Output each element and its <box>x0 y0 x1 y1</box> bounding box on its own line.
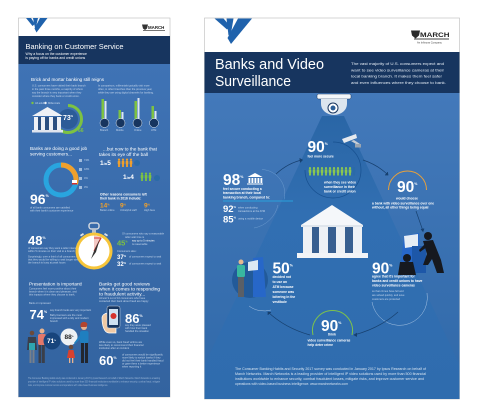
text: brick and mortar left: say the branch is very important when they <box>32 90 82 94</box>
bar chart: channels: Online <box>134 128 142 132</box>
intro text: want to see video surveillance cameras at their <box>351 68 445 72</box>
header band <box>204 52 460 93</box>
stat 48: % <box>42 236 46 240</box>
text: brick and mortar left: consider where they bank or credit union. <box>32 94 80 98</box>
stat 1 in 5: 1in5 <box>100 160 111 167</box>
icon: ATM user <box>232 257 268 298</box>
circle stat 88 <box>60 328 78 346</box>
bar chart: channels: Mobile <box>116 128 124 132</box>
text: 98 detail: feel secure conducting a <box>223 187 262 191</box>
text: 60 detail: more likely to switch banks if they <box>122 356 161 360</box>
March logo: An Infinova Company <box>417 40 443 44</box>
text: other wait: Consumers also: <box>117 249 137 253</box>
text: think: think <box>328 332 336 336</box>
text: 96 detail: of all bank consumers are satisfied <box>30 206 70 210</box>
donut chart <box>46 165 77 195</box>
circle stat 71: % <box>54 340 56 342</box>
March logo: MARCH <box>420 32 450 39</box>
label: impressed: Bank or impressed <box>29 301 51 305</box>
title: Banking on Customer Service <box>26 42 123 51</box>
stat 73: % <box>71 115 74 118</box>
subtitle: Why a focus on the customer experience <box>26 52 87 56</box>
stat: 90 would choose: % <box>414 182 418 186</box>
footer text: operations with video-based business intelligence. www.marchnetworks.com <box>235 382 348 386</box>
stat 45: 45 <box>117 238 125 248</box>
people row <box>309 167 355 176</box>
heading: presentation: Presentation is important! <box>29 282 82 286</box>
text: 85 detail: using a mobile device <box>238 216 264 220</box>
circle stat 88: % <box>72 336 74 338</box>
icon: central bank <box>297 205 368 258</box>
text: 48 detail: within 5 minutes on their visit to a branch <box>28 249 75 253</box>
heading: banks doing a good job: Banks are doing a good job <box>30 146 87 151</box>
logo chevron <box>26 18 48 32</box>
people green <box>141 172 151 181</box>
text: 60 detail: did not feel their bank handled fraud <box>122 358 164 362</box>
stat 32: % <box>124 262 127 265</box>
text: waiting heading: Of consumers who say a reasonable <box>122 232 165 236</box>
donut legend <box>79 158 90 189</box>
footer text: provider of intelligent IP video solutions used by more than 500 financial institutions worldwide to enhance security, combat fraud, mitigate <box>28 380 160 384</box>
donut legend: 74% <box>84 158 90 162</box>
text: 48 detail: that they would be willing to wait longer when <box>28 258 80 262</box>
text: 86 detail: with how their bank <box>125 326 148 330</box>
text: agree small: so that crimes have fell and <box>372 289 404 293</box>
stats orange row: 9 <box>120 202 124 210</box>
text: brick and mortar left: U.S. consumers have visited their bank branch <box>32 84 86 88</box>
heading: good reviews: when it comes to responding <box>99 286 160 292</box>
March logo <box>142 24 165 31</box>
icon: woman and child <box>67 322 88 363</box>
text: decided not: to use an <box>272 280 287 284</box>
text: 48 detail: Surprisingly, over a third of all consumers say <box>28 254 81 258</box>
stats captions: High fees <box>144 208 156 212</box>
text: would choose: would choose <box>395 196 418 200</box>
text: 45 detail: is reasonable <box>132 242 148 246</box>
arc: agree circle <box>372 293 427 325</box>
footer text: institutions worldwide to enhance security, combat fraudulent losses, mitigate risks, and improve customer service and <box>235 377 424 381</box>
title: Banks and Video <box>215 57 324 73</box>
text: brick and mortar right: often, in other branches than the previous year, <box>98 87 152 91</box>
arrow: agree to think <box>354 312 398 336</box>
icon: ATM robbers <box>398 232 444 275</box>
stat 96: % <box>46 194 50 198</box>
text: 92 detail: transactions at the ATM <box>238 209 265 213</box>
donut legend: 3% <box>84 185 88 189</box>
heading: but now to the bank: ...but now to the bank that <box>103 146 157 152</box>
text: bank with video: a bank with video surveillance over one <box>372 202 434 206</box>
stat 86: 86 <box>125 311 139 326</box>
stat 92: 92 <box>223 204 234 215</box>
stats captions: Better online <box>100 208 115 212</box>
stat: 90 think <box>312 311 352 335</box>
arc: 98 circle <box>254 170 285 228</box>
text: when they see: bank or credit union <box>324 190 356 194</box>
stat: 90 agree: 90 <box>372 260 389 278</box>
arrow: 98 to 90 <box>276 158 302 174</box>
stat: 90 feel more secure: 90 <box>308 139 325 156</box>
text: brick and mortar right: In comparison, millennials typically visit more <box>98 84 150 88</box>
stat: 90 would choose <box>388 171 426 196</box>
stat 85: 85 <box>223 214 234 226</box>
text: agree small: customers are protected <box>372 297 401 301</box>
March logo: MARCH <box>148 25 164 30</box>
text: 32 detail: of consumers expect to wait <box>129 262 161 266</box>
text: presentation: this impacts where they choose to bank. <box>29 292 75 296</box>
text: when they see: surveillance in their <box>324 185 356 189</box>
March logo <box>411 30 450 44</box>
text: decided not: ATM because <box>272 285 294 289</box>
bar chart: channels: Branch <box>100 128 109 132</box>
text: good reviews: contacted their bank about fraud are happy <box>99 299 149 303</box>
text: 74 detail: say branch looks are very important <box>50 308 91 312</box>
divider line <box>223 200 293 202</box>
icon: small bank <box>247 173 263 184</box>
stat: 50: % <box>290 264 294 268</box>
stat: 98 feel secure: % <box>240 175 244 179</box>
footer text: risks, and improve customer service and operations with video-based business intelligence. <box>28 383 108 387</box>
stat: 90 think: % <box>338 321 342 325</box>
stat 66: 66 <box>78 128 84 134</box>
title: Surveillance <box>215 74 291 90</box>
legend: All adults <box>35 101 46 105</box>
stat: 90 agree: % <box>389 264 393 268</box>
icon: couple <box>27 328 46 363</box>
person marker teal <box>154 175 160 181</box>
text: 60 intro: institution after an incident <box>99 346 129 350</box>
green ring with 73 <box>54 106 82 132</box>
donut legend: 4% <box>84 176 88 180</box>
panel: banking on customer service <box>18 18 170 397</box>
people orange <box>118 158 132 167</box>
stat 86: % <box>139 314 143 318</box>
logo chevron <box>214 18 252 44</box>
stat 1 in 4: 1in4 <box>123 174 134 181</box>
icon: dome camera <box>317 94 351 115</box>
text: good reviews: Almost 9 out of 10 consumers who have <box>99 296 146 300</box>
stat 32: 32 <box>117 262 124 268</box>
header band <box>18 36 170 64</box>
camera beam <box>204 116 460 399</box>
stat 73: 73 <box>63 115 71 122</box>
text: brick and mortar left: in the past three months, a majority of whom <box>32 87 83 91</box>
stat: 50: 50 <box>272 260 290 278</box>
stat 48: 48 <box>28 233 42 248</box>
text: presentation: branch when it is clean and pleasant, and <box>29 290 77 294</box>
text: 37 detail: of consumers expect to wait <box>129 254 161 258</box>
stat 45: % <box>125 240 128 244</box>
footer text: March Networks. March Networks is a leading provider of intelligent IP video solutions used by more than 500 financial <box>235 372 426 376</box>
text: 74 detail: Baby boomers are the most <box>50 313 82 317</box>
stats orange row: 14 <box>100 202 107 210</box>
text: agree small: are solved quickly, and save <box>372 293 405 297</box>
arc: 50 circle <box>249 306 271 311</box>
stats orange row: % <box>107 204 110 206</box>
text: brick and mortar right: while they are using digital channels for banking. <box>98 90 154 94</box>
stats orange row: % <box>148 204 151 206</box>
person marker blue <box>134 160 140 166</box>
text: presentation: Consumers feel more positive about their <box>29 286 76 290</box>
circle stat 88: 88 <box>64 334 72 341</box>
donut legend: 18% <box>84 167 90 171</box>
stat 60: % <box>113 356 117 360</box>
heading: good reviews: Banks get good reviews <box>99 282 150 288</box>
text: 98 detail: transaction at their local <box>223 191 261 195</box>
arrow: choose to agree <box>416 211 424 232</box>
text: decided not: decided not <box>272 275 292 279</box>
stat 74: % <box>44 310 48 314</box>
text: waiting heading: teller wait time is <box>125 235 145 239</box>
text: 60 intro: While even so, bank fraud victims are <box>99 340 143 344</box>
text: other reasons heading: Other reasons consumers left <box>100 192 147 196</box>
text: deter crime: video surveillance cameras <box>308 338 351 342</box>
arrow: think to 50 <box>268 312 310 335</box>
body background <box>18 64 170 397</box>
text: 74 detail: branch <box>50 319 58 323</box>
text: 86 detail: handled the situation <box>125 329 149 333</box>
footer text: The Consumer Banking Habits and Security 2017 survey was conducted in January 2017 by Ipsos Research on behalf of <box>235 367 426 371</box>
text: 48 detail: of consumers say they want a teller interaction <box>28 246 82 250</box>
icon: phone in hand <box>102 306 120 333</box>
text: feel more secure: feel more secure <box>308 154 334 158</box>
circle stat 71: 71 <box>47 338 54 345</box>
stats captions <box>100 208 156 212</box>
arc: secure circle <box>305 142 361 198</box>
text: 98 detail: banking branch, compared to: <box>223 196 270 200</box>
text: decided not: loitering in the <box>272 295 295 299</box>
legend: Millennials <box>48 101 61 105</box>
text: 60 detail: when reporting it <box>122 364 141 368</box>
stat: 90 think: 90 <box>321 318 338 335</box>
stats orange row: 9 <box>144 202 148 210</box>
text: when they see: when they see video <box>323 180 356 184</box>
intro text: local banking branch. It makes them feel safer <box>351 74 443 78</box>
bar chart: channels: ATM <box>151 128 156 132</box>
stat: 98 feel secure: 98 <box>223 172 240 189</box>
circle stat 71 <box>44 332 60 350</box>
intro text: The vast majority of U.S. consumers expect and <box>351 62 444 66</box>
text: 60 intro: less likely to recommend their financial <box>99 343 144 347</box>
heading: brick and mortar: Brick and mortar banking still reigns <box>31 77 105 82</box>
legend <box>31 101 61 105</box>
text: agree: video surveillance cameras <box>372 284 415 288</box>
footer text: The Consumer Banking Habits study was conducted in January 2017 by Ipsos Research on behalf of March Networks. March Networks is a leading <box>28 376 160 380</box>
heading: banks doing a good job: serving customers... <box>30 152 72 156</box>
text: agree: agree that it's important for <box>372 274 415 278</box>
stats captions: Unhelpful staff <box>120 208 137 212</box>
stat 60: 60 <box>99 353 113 368</box>
stat 37: % <box>124 255 127 258</box>
text: 92 detail: when conducting <box>238 206 258 210</box>
text: 96 detail: with their bank's customer experience <box>30 208 74 212</box>
stat: 90 would choose: 90 <box>397 179 414 196</box>
text: decided not: someone was <box>272 290 294 294</box>
stat 96: 96 <box>30 191 46 207</box>
body background <box>204 93 460 399</box>
text: 60 detail: or gave them a better experience <box>122 362 161 366</box>
text: agree: banks and credit unions to have <box>372 279 423 283</box>
arrow: secure to choose <box>363 160 388 175</box>
stats orange row: % <box>124 204 127 206</box>
text: 60 detail: of consumers would be significantly <box>122 352 164 356</box>
text: 74 detail: impressed with a tidy and modern <box>50 316 89 320</box>
heading: good reviews: to fraudulent activity... <box>99 292 145 298</box>
text: deter crime: help deter crime <box>308 343 333 347</box>
stat 92: % <box>234 206 237 209</box>
text: 86 detail: say they were pleased <box>125 323 151 327</box>
intro text: and even influences where they choose to bank. <box>351 81 446 85</box>
stat: 90 feel more secure: % <box>325 142 329 146</box>
stat 85: % <box>234 216 237 220</box>
icon: bank <box>32 107 63 132</box>
panel: banks and video surveillance <box>204 18 460 399</box>
stats orange row <box>100 202 151 210</box>
heading: but now to the bank: takes its eye off the ball <box>99 152 148 157</box>
icon: wall camera <box>342 134 361 148</box>
text: bank with video: without, all other things being equal <box>371 206 428 210</box>
title <box>215 57 324 90</box>
stat 74: 74 <box>30 307 44 322</box>
icon: stopwatch <box>76 223 112 270</box>
bar chart: channels <box>100 98 158 132</box>
stat 37: 37 <box>117 255 124 261</box>
subtitle: is paying off for banks and credit unions <box>26 56 85 60</box>
text: 48 detail: the branch is busy at peak hours <box>28 260 66 264</box>
text: decided not: vestibule <box>272 300 287 304</box>
text: other reasons heading: their bank in 2016 include: <box>100 196 141 200</box>
text: 45 detail: say up to 5 minutes <box>132 238 155 242</box>
